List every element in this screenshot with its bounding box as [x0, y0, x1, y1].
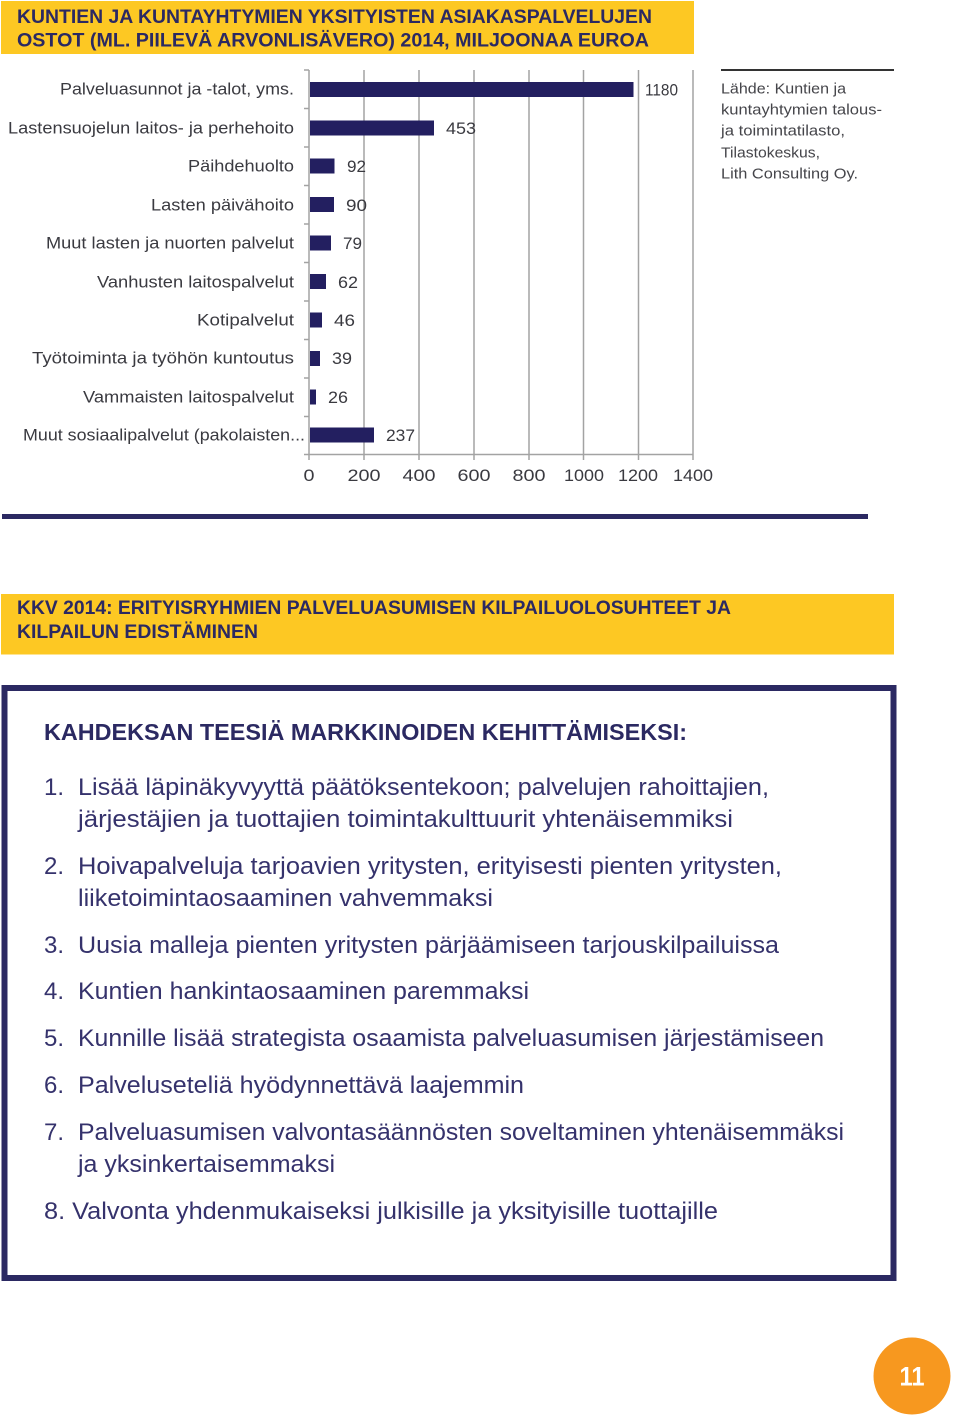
panel: eight theses [4, 688, 894, 1278]
value labels: 46 [334, 311, 355, 330]
heading: purchases chart title [1, 1, 694, 54]
page number badge: 11 [900, 1362, 924, 1392]
source note: ja toimintatilasto, [720, 122, 845, 140]
heading: KKV 2014 [1, 594, 894, 654]
value labels: 26 [328, 388, 348, 407]
heading: KKV 2014: KKV 2014: ERITYISRYHMIEN PALVELUASUMISEN KILPAILUOLOSUHTEET JA [17, 598, 731, 619]
value labels [328, 80, 678, 445]
axis labels: 600 [458, 466, 490, 485]
bars [310, 82, 634, 442]
thesis list: liiketoimintaosaaminen vahvemmaksi [78, 885, 493, 912]
thesis list: Palveluseteliä hyödynnettävä laajemmin [78, 1072, 524, 1099]
value labels: 79 [343, 234, 362, 253]
thesis list: 3. [44, 932, 64, 959]
axis labels: 400 [402, 466, 436, 485]
source note: Tilastokeskus, [721, 144, 820, 162]
bar chart: purchases by service [8, 70, 713, 485]
page number badge [874, 1338, 950, 1414]
thesis list [44, 774, 844, 1225]
value labels: 90 [346, 196, 367, 215]
value labels: 453 [446, 119, 476, 138]
category labels: Muut lasten ja nuorten palvelut [46, 234, 294, 252]
thesis list: 6. [44, 1072, 64, 1099]
value labels: 237 [386, 426, 415, 445]
category labels: Palveluasunnot ja -talot, yms. [60, 80, 294, 98]
thesis list: Kuntien hankintaosaaminen paremmaksi [78, 978, 529, 1005]
heading: purchases chart title: OSTOT (ML. PIILEVÄ ARVONLISÄVERO) 2014, MILJOONAA EUROA [17, 30, 649, 52]
value labels: 1180 [645, 80, 678, 100]
heading: KKV 2014: KILPAILUN EDISTÄMINEN [17, 622, 258, 643]
thesis list: Hoivapalveluja tarjoavien yritysten, erityisesti pienten yritysten, [78, 853, 782, 880]
value labels: 92 [347, 157, 366, 176]
thesis list: Uusia malleja pienten yritysten pärjäämiseen tarjouskilpailuissa [78, 932, 780, 959]
axis labels: 800 [512, 466, 546, 485]
thesis list: 2. [44, 853, 64, 880]
value labels: 39 [332, 349, 352, 368]
axis labels [304, 466, 713, 485]
thesis list: Lisää läpinäkyvyyttä päätöksentekoon; palvelujen rahoittajien, [78, 774, 769, 801]
thesis list: järjestäjien ja tuottajien toimintakulttuurit yhtenäisemmiksi [77, 806, 733, 833]
category labels [8, 80, 305, 444]
thesis list: Palveluasumisen valvontasäännösten soveltaminen yhtenäisemmäksi [78, 1119, 844, 1146]
axis labels: 1400 [673, 466, 713, 485]
source note [720, 69, 894, 182]
category labels: Kotipalvelut [197, 310, 294, 330]
thesis list: 1. [44, 774, 64, 801]
category labels: Vammaisten laitospalvelut [83, 388, 294, 406]
thesis list: 8. Valvonta yhdenmukaiseksi julkisille ja yksityisille tuottajille [44, 1198, 718, 1225]
value labels: 62 [338, 273, 358, 292]
source note: Lähde: Kuntien ja [721, 80, 847, 98]
axis labels: 200 [348, 466, 380, 485]
heading: purchases chart title: KUNTIEN JA KUNTAYHTYMIEN YKSITYISTEN ASIAKASPALVELUJEN [17, 7, 652, 28]
category labels: Lasten päivähoito [151, 196, 294, 214]
axis labels: 0 [304, 466, 314, 485]
source note: kuntayhtymien talous- [721, 102, 882, 118]
category labels: Vanhusten laitospalvelut [97, 272, 294, 292]
category labels: Työtoiminta ja työhön kuntoutus [32, 348, 294, 368]
thesis list: 5. [44, 1025, 64, 1052]
category labels: Muut sosiaalipalvelut (pakolaisten... [23, 426, 305, 444]
thesis list: 7. [44, 1119, 64, 1146]
category labels: Päihdehuolto [188, 156, 294, 176]
panel heading: KAHDEKSAN TEESIÄ MARKKINOIDEN KEHITTÄMISEKSI: [44, 719, 687, 745]
thesis list: 4. [44, 978, 64, 1005]
source note: Lith Consulting Oy. [721, 166, 858, 182]
thesis list: Kunnille lisää strategista osaamista palveluasumisen järjestämiseen [78, 1025, 824, 1052]
axis labels: 1000 [564, 466, 604, 485]
axis labels: 1200 [618, 466, 658, 485]
category labels: Lastensuojelun laitos- ja perhehoito [8, 118, 294, 138]
thesis list: ja yksinkertaisemmaksi [77, 1151, 335, 1178]
